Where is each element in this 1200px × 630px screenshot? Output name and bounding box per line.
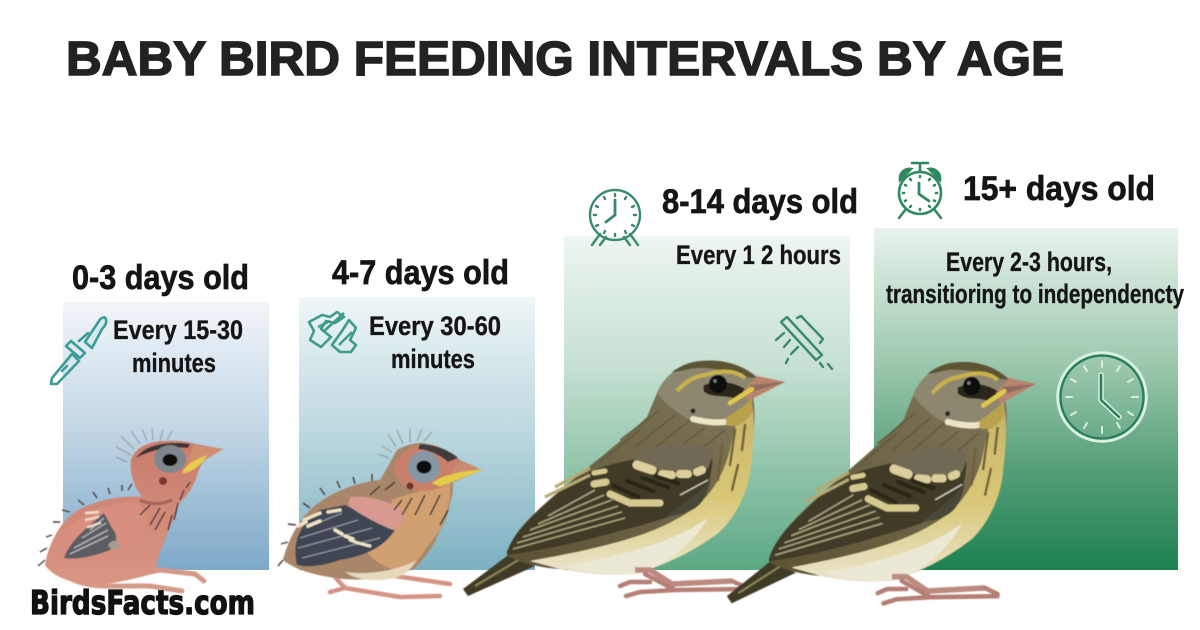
interval text: every 2-3 hours transitioning — [886, 247, 1184, 309]
panel: 0-3 days old — [63, 259, 269, 570]
logo: BirdsFacts.com: BirdsFacts.com — [30, 583, 255, 622]
interval text: every 30-60 minutes — [369, 311, 501, 374]
interval text: every 15-30 minutes: minutes — [132, 348, 216, 378]
heading: 4-7 days old: 4-7 days old — [332, 254, 509, 292]
panel: 8-14 days old — [564, 183, 858, 570]
title: BABY BIRD FEEDING INTERVALS BY AGE — [66, 33, 1064, 86]
bird: nestling 4-7 days — [278, 428, 482, 597]
interval text: every 15-30 minutes — [113, 315, 243, 378]
icon: large clock — [1059, 354, 1145, 440]
interval text: every 15-30 minutes: Every 15-30 — [113, 315, 243, 345]
icon: feeding tool — [309, 312, 356, 352]
icon: alarm clock with bells — [899, 163, 941, 218]
interval text: every 30-60 minutes: Every 30-60 — [369, 311, 501, 341]
interval text: every 2-3 hours transitioning: Every 2-3 hours, — [946, 247, 1112, 277]
icon: bottle with drops — [776, 316, 832, 369]
icon: alarm clock with legs — [590, 190, 640, 245]
panel: 15+ days old — [874, 170, 1184, 570]
interval text: every 30-60 minutes: minutes — [391, 344, 475, 374]
bird: hatchling 0-3 days — [38, 428, 223, 591]
heading: 8-14 days old: 8-14 days old — [662, 183, 858, 221]
icon: dropper — [51, 317, 106, 384]
bird: juvenile 8-14 days — [463, 360, 785, 596]
bird: fledgling 15+ days — [727, 362, 1036, 603]
interval text: every 1 2 hours: Every 1 2 hours — [676, 240, 841, 270]
heading: 0-3 days old: 0-3 days old — [72, 259, 249, 297]
panel: 4-7 days old — [299, 254, 535, 570]
heading: 15+ days old: 15+ days old — [963, 170, 1155, 208]
